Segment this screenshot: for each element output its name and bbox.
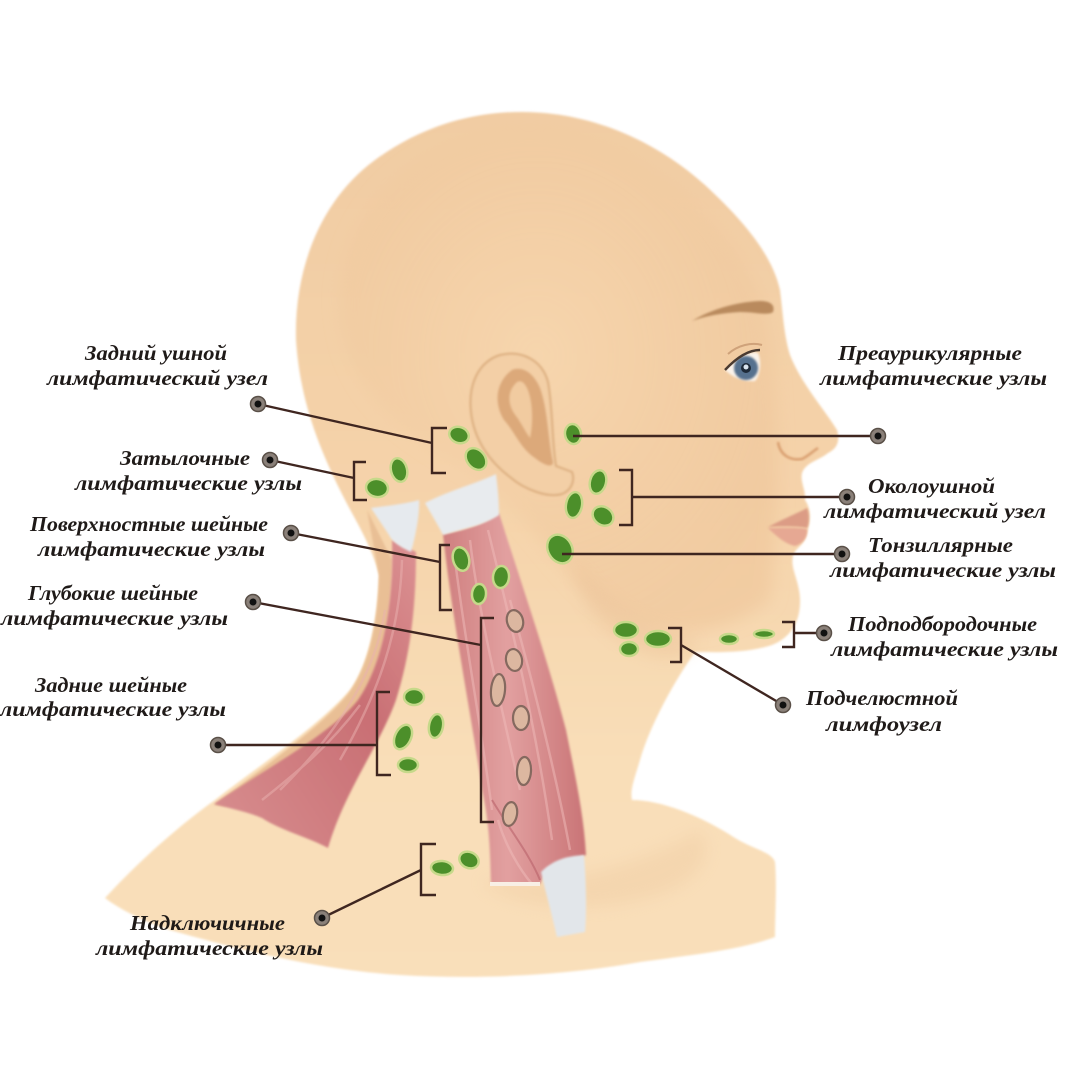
callout: tonsillar nodes: лимфатические узлы — [829, 558, 1056, 582]
callout: superficial cervical nodes — [29, 512, 452, 610]
callout: submental nodes — [782, 612, 1058, 661]
neck shadow under jaw — [575, 560, 700, 657]
lips — [768, 508, 809, 528]
callout: superficial cervical nodes: лимфатические узлы — [37, 537, 265, 561]
shoulder edge highlight — [480, 830, 706, 907]
callout: posterior cervical nodes — [0, 673, 391, 775]
muscle: trapezius — [214, 500, 419, 848]
lymph nodes: deep cervical, inside muscle — [490, 608, 532, 827]
upper tendon — [425, 474, 499, 535]
callout: posterior auricular node: Задний ушной — [84, 341, 227, 365]
ear — [470, 354, 573, 495]
lymph nodes: green — [365, 423, 774, 876]
trapezius tendon — [371, 500, 419, 552]
callout: submandibular node: Подчелюстной — [805, 686, 958, 710]
callout: supraclavicular nodes: Надключичные — [129, 911, 285, 935]
callout: occipital nodes: Затылочные — [119, 446, 250, 470]
nose nostril — [778, 442, 818, 459]
callout: submandibular node: лимфоузел — [825, 712, 942, 736]
callout: posterior cervical nodes: лимфатические узлы — [0, 697, 226, 721]
callout: parotid node — [619, 470, 1046, 525]
callout: tonsillar nodes: Тонзиллярные — [868, 533, 1013, 557]
callout: deep cervical nodes: лимфатические узлы — [0, 606, 228, 630]
callout: deep cervical nodes: Глубокие шейные — [27, 581, 198, 605]
face features — [692, 301, 818, 546]
callout: supraclavicular nodes — [95, 844, 436, 960]
callout: submental nodes: лимфатические узлы — [830, 637, 1058, 661]
callout: parotid node: лимфатический узел — [823, 499, 1046, 523]
callout: posterior auricular node: лимфатический узел — [46, 366, 268, 390]
callout: preauricular nodes: Преаурикулярные — [837, 341, 1022, 365]
callout: occipital nodes — [74, 446, 367, 500]
callout: deep cervical nodes — [0, 581, 494, 822]
lower tendon — [541, 855, 586, 937]
callout: posterior cervical nodes: Задние шейные — [34, 673, 187, 697]
head and shoulders silhouette — [105, 112, 838, 977]
callout: parotid node: Околоушной — [868, 474, 995, 498]
callout: tonsillar nodes — [562, 533, 1056, 582]
eyebrow — [692, 301, 774, 321]
callout: submandibular node — [668, 628, 958, 736]
callout: submental nodes: Подподбородочные — [847, 612, 1037, 636]
callout: posterior auricular node — [46, 341, 447, 473]
muscle: sternocleidomastoid — [425, 474, 586, 937]
callout: preauricular nodes: лимфатические узлы — [819, 366, 1047, 390]
callout: preauricular nodes — [573, 341, 1047, 444]
callout: supraclavicular nodes: лимфатические узлы — [95, 936, 323, 960]
callout: superficial cervical nodes: Поверхностные шейные — [29, 512, 268, 536]
callout: occipital nodes: лимфатические узлы — [74, 471, 302, 495]
eye — [725, 352, 760, 381]
